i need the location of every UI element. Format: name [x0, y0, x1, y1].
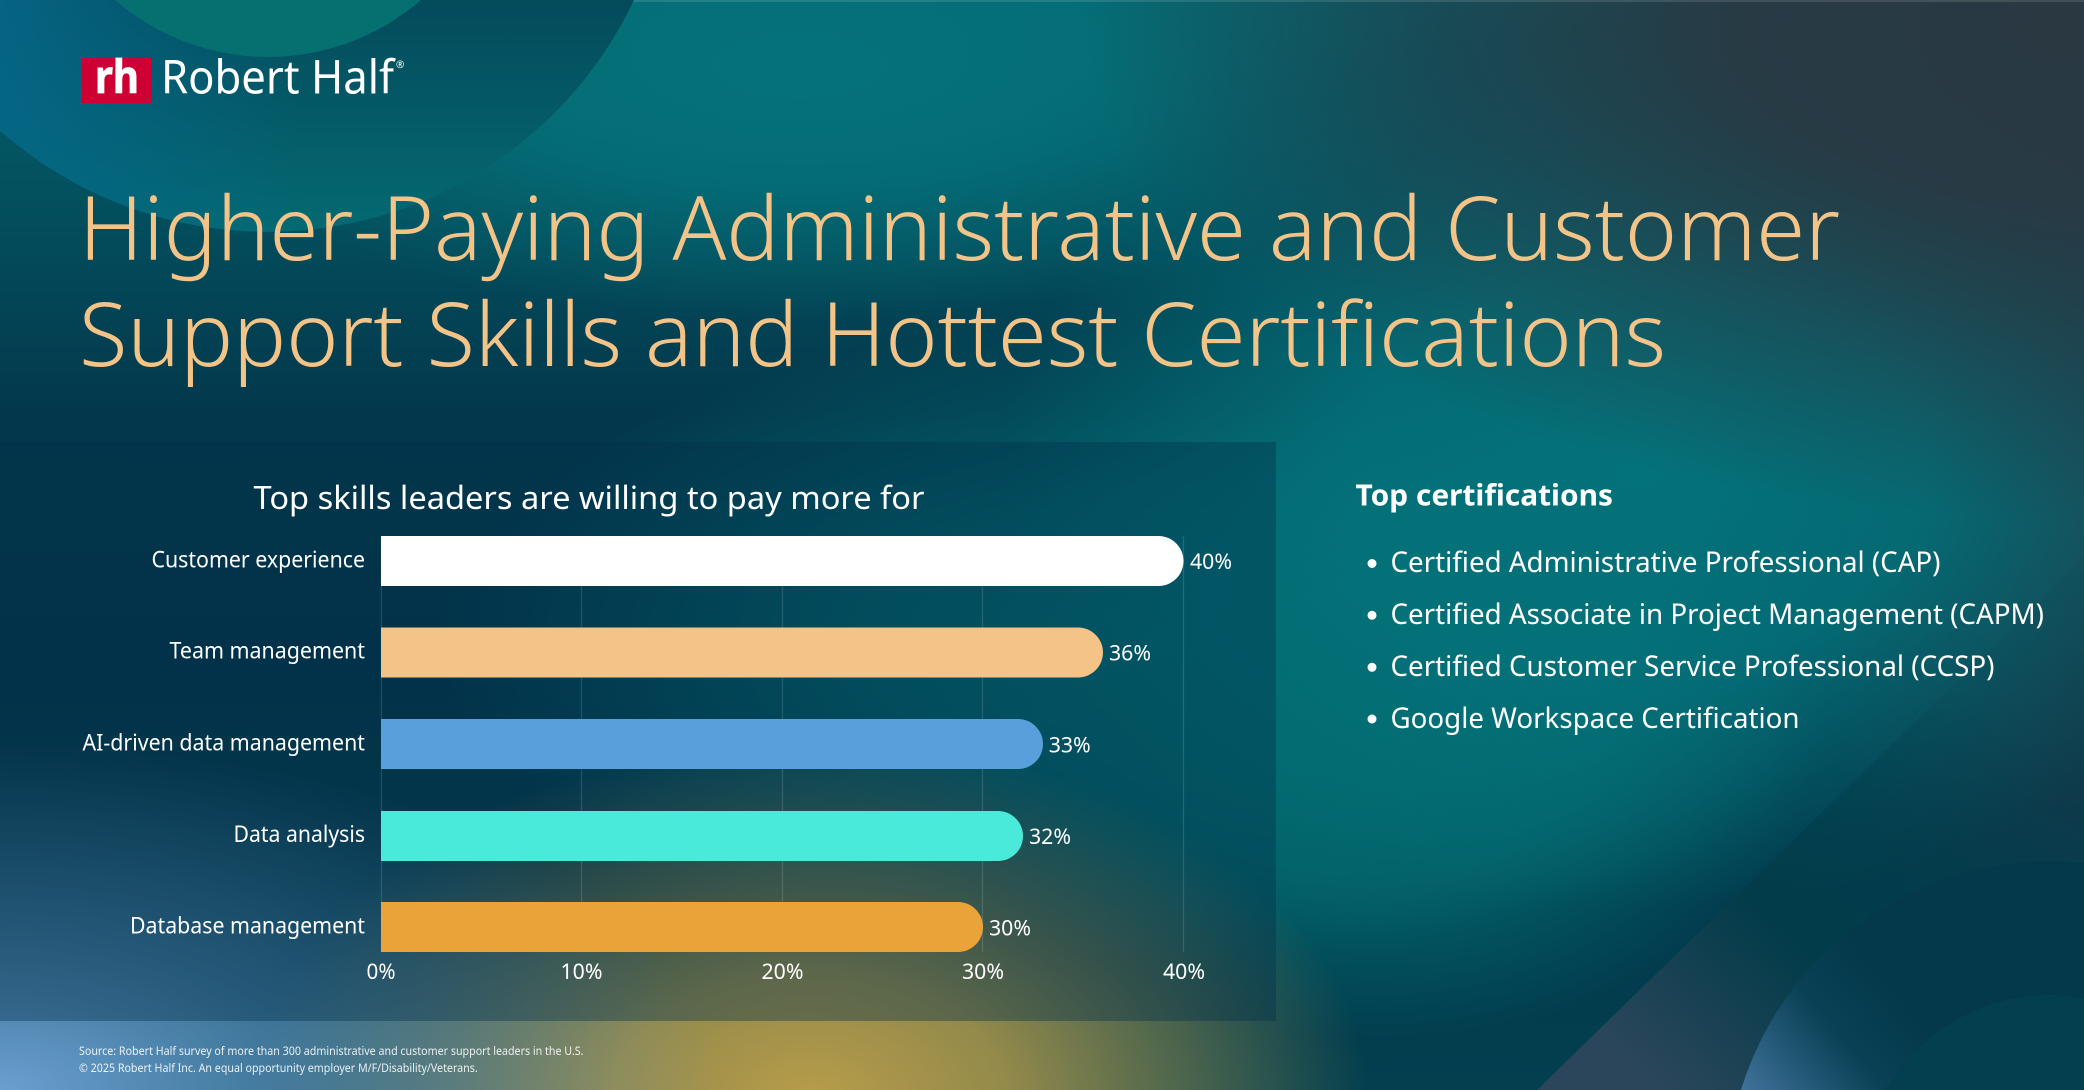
footer: source and copyright: Source: Robert Half survey of more than 300 administrative and customer support leaders in the U.S.: [79, 1043, 584, 1059]
bar: Customer experience 40%: 40%: [1190, 547, 1232, 576]
chart title: Top skills leaders are willing to pay more for: [254, 476, 924, 519]
decorative wedge: bottom right: [1537, 557, 2084, 1090]
list: certifications: Google Workspace Certification: [1390, 699, 1800, 737]
decorative arc: bottom right outer: [1741, 861, 2084, 1090]
logo wordmark: Robert Half: [161, 44, 397, 108]
logo registered mark: ®: [396, 57, 404, 71]
heading: Top certifications: Top certifications: [1356, 474, 1613, 514]
x axis labels: 30%: [962, 957, 1004, 986]
top edge highlight: [0, 0, 2084, 2]
title: Support Skills and Hottest Certifications: [79, 272, 1666, 392]
bar: Customer experience 40%: [152, 536, 1232, 586]
bar: AI-driven data management 33%: [82, 719, 1091, 769]
list: certifications: [1368, 543, 2044, 737]
bar: Team management 36%: Team management: [170, 635, 365, 666]
logo mark: red square: rh: [95, 45, 139, 107]
x axis labels: 10%: [560, 957, 602, 986]
x axis labels: 40%: [1163, 957, 1205, 986]
bar: Database management 30%: Database management: [130, 910, 365, 940]
bar: AI-driven data management 33%: AI-driven data management: [82, 727, 365, 758]
list: certifications: Certified Administrative Professional (CAP): [1390, 543, 1940, 581]
decorative circle: large top-left: [0, 0, 634, 232]
bar: Data analysis 32%: 32%: [1029, 822, 1071, 851]
bar: Customer experience 40%: Customer experience: [152, 544, 365, 574]
footer: source and copyright: © 2025 Robert Half Inc. An equal opportunity employer M/F/Disability/Veterans.: [79, 1060, 478, 1076]
bar: Database management 30%: 30%: [989, 914, 1031, 942]
decorative arc: bottom right inner: [1886, 995, 2084, 1090]
x axis labels: 0%: [366, 957, 396, 986]
x axis labels: [366, 957, 1205, 986]
list: certifications: Certified Associate in Project Management (CAPM): [1390, 595, 2044, 633]
bar: Team management 36%: 36%: [1109, 638, 1151, 668]
bar: Database management 30%: [130, 902, 1031, 952]
footer: source and copyright: [79, 1043, 584, 1076]
bar: Team management 36%: [170, 628, 1151, 678]
x axis labels: 20%: [762, 957, 804, 986]
decorative circle: inner top-left: [115, 0, 421, 57]
title: [79, 166, 1840, 392]
bar: Data analysis 32%: Data analysis: [234, 818, 365, 849]
logo: Robert Half: [82, 44, 404, 108]
bar: AI-driven data management 33%: 33%: [1049, 730, 1091, 759]
panel: chart background: [0, 442, 1276, 1021]
bar chart: [82, 536, 1232, 986]
bar: Data analysis 32%: [234, 811, 1071, 861]
list: certifications: Certified Customer Service Professional (CCSP): [1390, 647, 1994, 685]
title: Higher-Paying Administrative and Customer: [79, 166, 1840, 286]
